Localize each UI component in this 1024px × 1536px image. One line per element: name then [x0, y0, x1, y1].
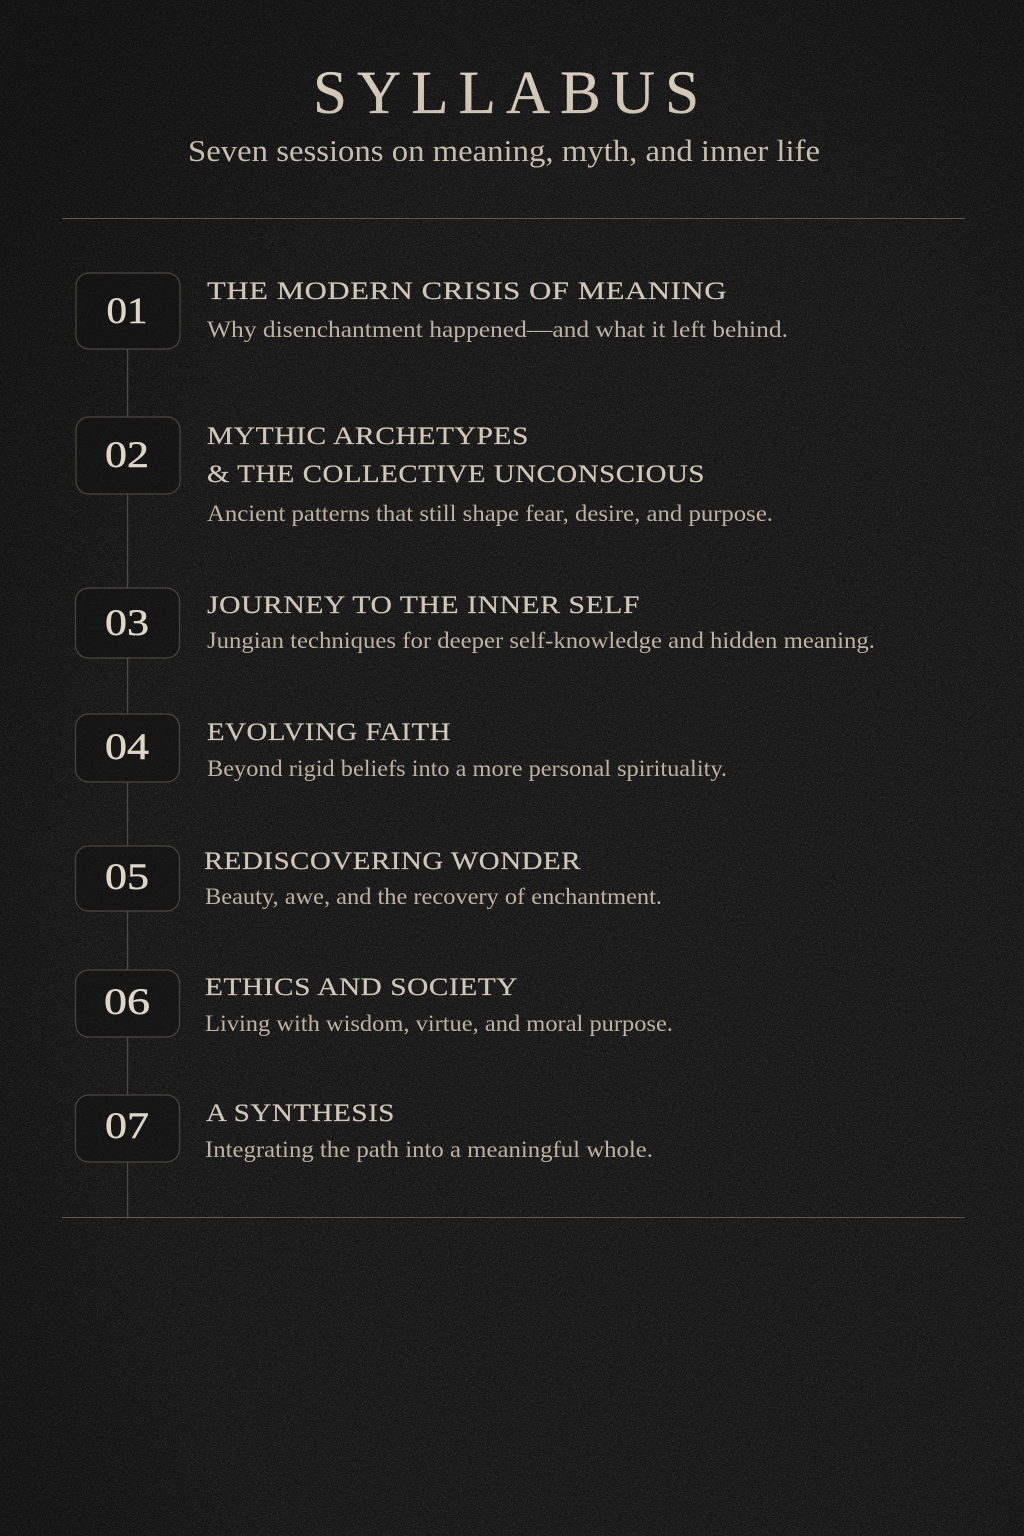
- description 06: Living with wisdom, virtue, and moral purpose.: [205, 1011, 673, 1037]
- description 07: Integrating the path into a meaningful whole.: [205, 1137, 653, 1163]
- description 02: Ancient patterns that still shape fear, desire, and purpose.: [207, 501, 773, 527]
- number badge 04: [76, 714, 180, 782]
- number badge 01: [76, 273, 180, 349]
- subtitle: Seven sessions on meaning, myth, and inner life: [188, 133, 820, 168]
- number badge 03: 03: [105, 603, 149, 644]
- heading 05: REDISCOVERING WONDER: [204, 846, 581, 875]
- session 04: [76, 714, 727, 782]
- session 07: [76, 1095, 653, 1163]
- heading 07: A SYNTHESIS: [206, 1098, 395, 1127]
- description 01: Why disenchantment happened—and what it left behind.: [207, 317, 788, 343]
- heading 02: [207, 421, 705, 488]
- heading 02: & THE COLLECTIVE UNCONSCIOUS: [207, 459, 705, 488]
- title: SYLLABUS: [313, 60, 699, 127]
- heading 04: EVOLVING FAITH: [207, 717, 451, 746]
- session 02: [76, 417, 773, 527]
- session 05: [76, 846, 662, 911]
- number badge 06: [76, 970, 180, 1037]
- number badge 03: [76, 588, 180, 658]
- number badge 07: 07: [105, 1106, 149, 1147]
- number badge 02: [76, 417, 180, 494]
- heading 02: MYTHIC ARCHETYPES: [207, 421, 529, 450]
- number badge 02: 02: [105, 435, 149, 476]
- heading 03: JOURNEY TO THE INNER SELF: [207, 590, 640, 619]
- description 03: Jungian techniques for deeper self-knowledge and hidden meaning.: [207, 628, 875, 654]
- number badge 06: 06: [104, 982, 150, 1023]
- description 04: Beyond rigid beliefs into a more personal spirituality.: [207, 756, 727, 782]
- number badge 01: 01: [106, 291, 148, 332]
- session 03: [76, 588, 875, 658]
- heading 06: ETHICS AND SOCIETY: [205, 972, 518, 1001]
- heading 01: THE MODERN CRISIS OF MEANING: [207, 276, 727, 305]
- number badge 05: [76, 846, 180, 911]
- session 06: [76, 970, 673, 1037]
- number badge 04: 04: [105, 727, 149, 768]
- description 05: Beauty, awe, and the recovery of enchantment.: [205, 884, 662, 910]
- number badge 05: 05: [105, 857, 149, 898]
- session 01: [76, 273, 788, 349]
- number badge 07: [76, 1095, 180, 1162]
